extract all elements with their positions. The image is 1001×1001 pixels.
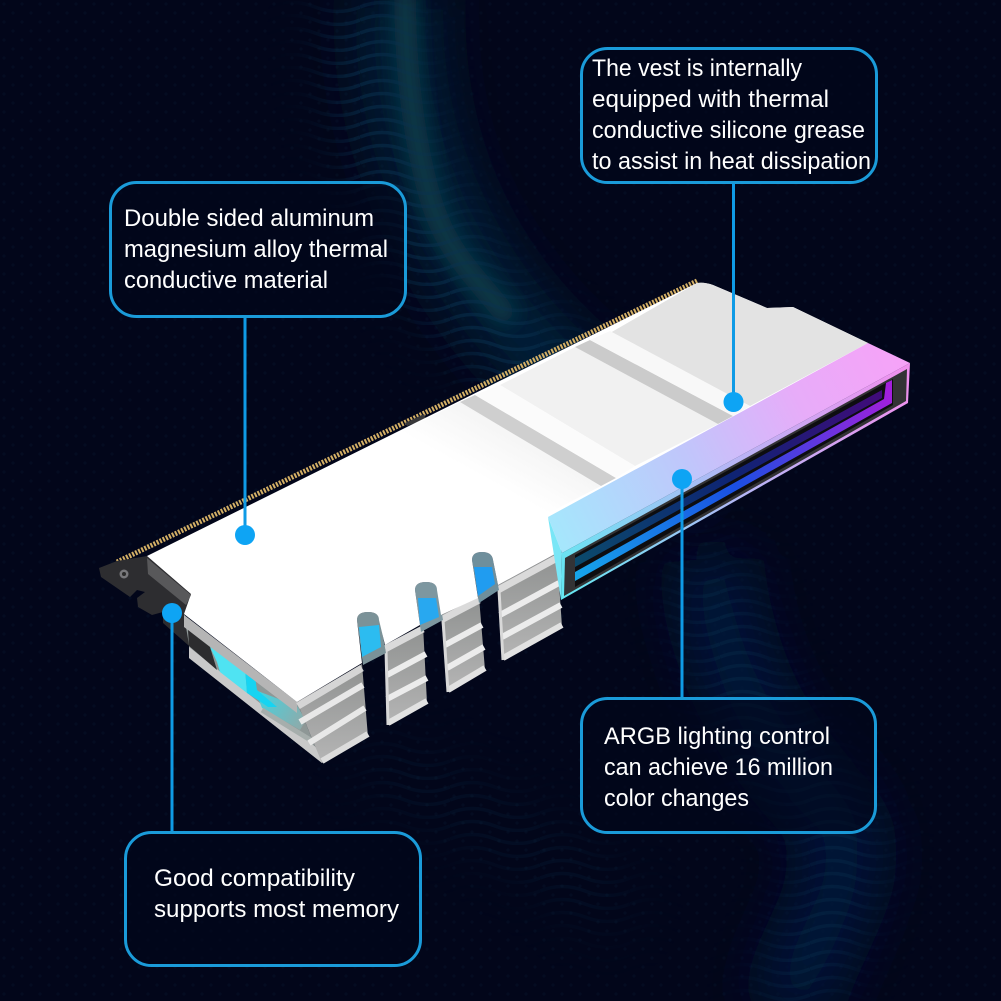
callout: aluminum magnesium alloy	[110, 182, 406, 545]
leader line and dot	[672, 469, 692, 698]
callout box	[582, 698, 876, 832]
callout text: color changes	[604, 785, 749, 812]
callout: thermal grease	[582, 48, 876, 412]
callout text	[154, 865, 399, 923]
heatsink fin segment C	[441, 597, 485, 692]
callout text: ARGB lighting control	[604, 723, 830, 750]
upper light slot	[575, 390, 882, 567]
callout text: can achieve 16 million	[604, 754, 833, 781]
callout: ARGB lighting control	[582, 469, 876, 832]
callout text: Good compatibility	[154, 865, 355, 892]
white top plate	[147, 283, 868, 702]
light bar dark housing	[564, 369, 907, 596]
leader line and dot	[235, 316, 255, 545]
callout text: to assist in heat dissipation	[592, 148, 871, 175]
callout text	[604, 723, 833, 812]
callout text: Double sided aluminum	[124, 205, 374, 232]
product: RAM heatsink with ARGB light bar	[99, 281, 910, 763]
callout: compatibility	[126, 603, 420, 966]
plate bevel at PCB end	[147, 558, 191, 605]
ARGB light bar	[548, 343, 910, 600]
light bar left side	[548, 517, 562, 600]
callout box	[126, 832, 420, 966]
fin notches with blue glow	[357, 552, 499, 665]
callout text	[592, 55, 871, 175]
plate groove 2	[575, 331, 750, 424]
callout box	[582, 48, 876, 182]
heatsink fin segment D	[498, 553, 562, 660]
callout text: conductive material	[124, 267, 328, 294]
callout text: magnesium alloy thermal	[124, 236, 388, 263]
background: dark navy with flowing dotted waves	[290, 0, 922, 1001]
callout text: equipped with thermal	[592, 86, 829, 113]
heatsink left side with cyan glow	[184, 615, 322, 763]
light bar front frame	[561, 363, 910, 600]
plate rear section	[610, 283, 868, 406]
plate groove 1	[460, 385, 635, 486]
leader line and dot	[724, 183, 744, 412]
heatsink fin segment B	[385, 625, 427, 725]
plate far part of front section	[400, 402, 601, 517]
heatsink fin segment A	[297, 664, 368, 763]
plate middle section	[500, 347, 718, 466]
callout box	[110, 182, 406, 316]
light bar top face	[548, 343, 910, 553]
callout text: conductive silicone grease	[592, 117, 865, 144]
small chip on the module edge	[405, 414, 426, 426]
callout text: The vest is internally	[592, 55, 802, 82]
callout text	[124, 205, 388, 294]
lower light slot	[575, 380, 892, 581]
callout text: supports most memory	[154, 896, 399, 923]
gold contact pins	[117, 281, 697, 562]
PCB mounting hole	[120, 570, 128, 578]
memory PCB end	[99, 556, 217, 670]
leader line and dot	[162, 603, 182, 832]
